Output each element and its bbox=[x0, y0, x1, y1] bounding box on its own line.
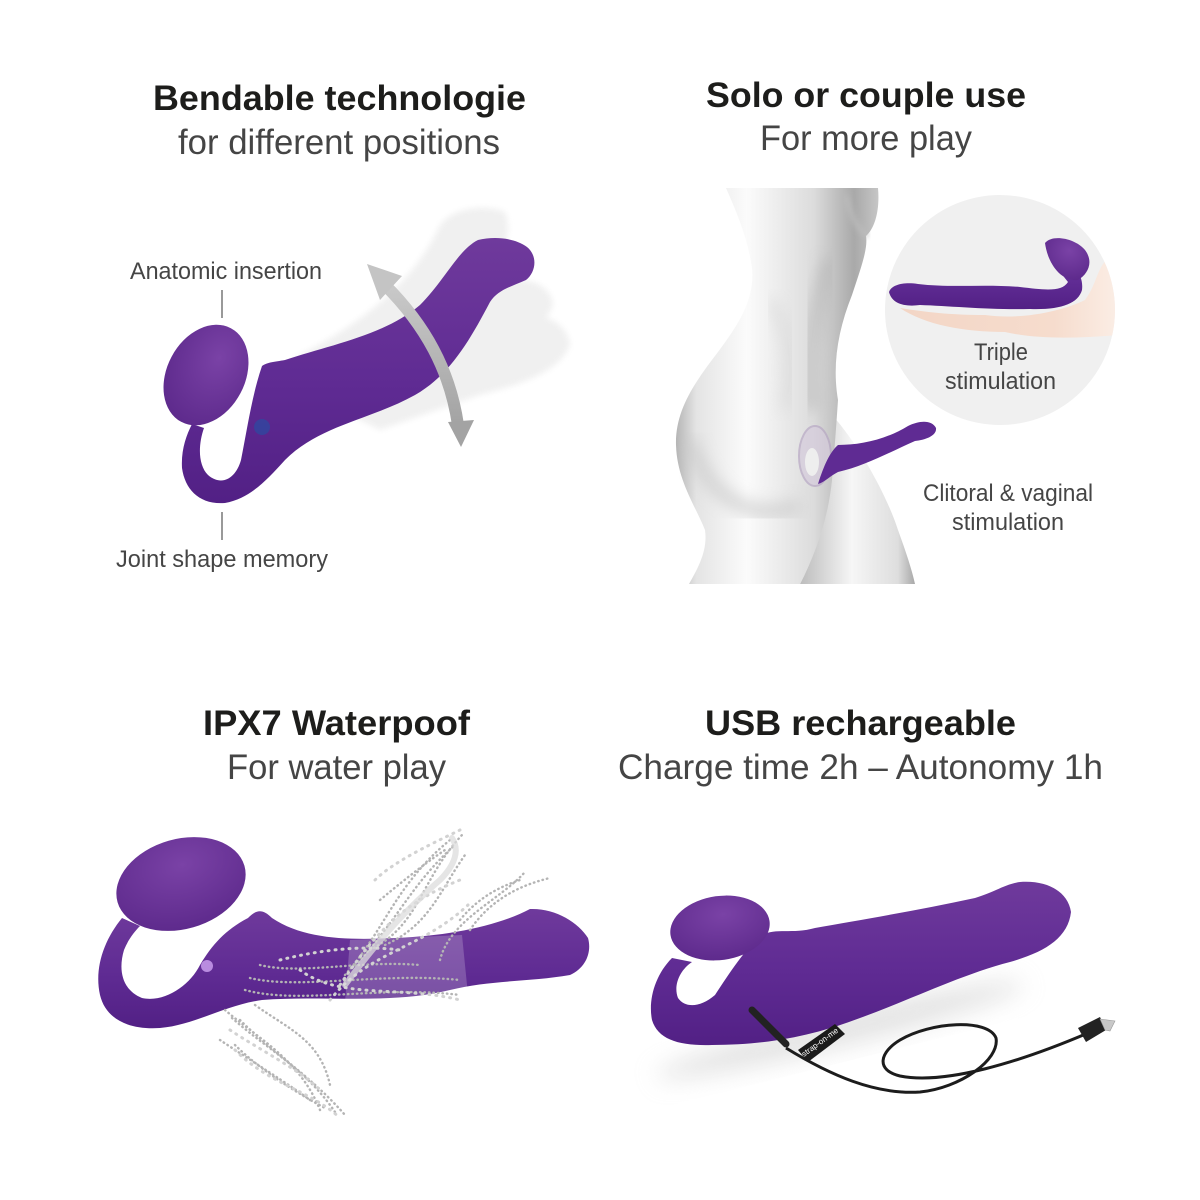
label: clitoral and vaginal stimulation: stimulation bbox=[952, 509, 1064, 536]
heading: solo or couple use bbox=[706, 76, 1026, 158]
label: triple stimulation bbox=[945, 339, 1056, 395]
power button bbox=[201, 960, 213, 972]
product: horizontal purple device bbox=[98, 823, 589, 1028]
front leg bbox=[800, 415, 915, 584]
panel: solo or couple use bbox=[676, 76, 1120, 584]
mannequin figure bbox=[676, 188, 915, 584]
small product worn on figure bbox=[799, 422, 936, 486]
panel: waterproof bbox=[98, 704, 589, 1118]
product shadow bbox=[652, 969, 1028, 1091]
heading: bendable technologie: Bendable technologie bbox=[153, 79, 526, 118]
label: joint shape memory: Joint shape memory bbox=[116, 546, 328, 573]
label: triple stimulation: stimulation bbox=[945, 368, 1056, 395]
power button bbox=[254, 419, 270, 435]
heading: USB rechargeable: Charge time 2h – Autonomy 1h bbox=[618, 748, 1103, 787]
heading: USB rechargeable bbox=[618, 704, 1103, 787]
inset circle: triple stimulation bbox=[885, 195, 1120, 425]
heading: solo or couple use: For more play bbox=[760, 119, 972, 158]
arrow: bend direction bbox=[367, 264, 474, 447]
water splash band bbox=[220, 830, 550, 1118]
product in hand bbox=[889, 238, 1089, 309]
cable tag text: strap-on-me bbox=[800, 1026, 841, 1059]
product: purple device with charging port bbox=[651, 882, 1071, 1045]
heading: solo or couple use: Solo or couple use bbox=[706, 76, 1026, 115]
label: clitoral and vaginal stimulation: Clitoral & vaginal bbox=[923, 480, 1093, 507]
hands holding product bbox=[900, 262, 1115, 338]
panel: USB rechargeable bbox=[618, 704, 1115, 1092]
heading: bendable technologie: for different positions bbox=[178, 123, 500, 162]
heading: IPX7 waterpoof: For water play bbox=[227, 748, 446, 787]
heading: USB rechargeable: USB rechargeable bbox=[705, 704, 1016, 743]
label: triple stimulation: Triple bbox=[974, 339, 1028, 366]
torso and rear leg bbox=[676, 188, 878, 584]
heading: bendable technologie bbox=[153, 79, 526, 162]
motion ghosts of the bending shaft bbox=[290, 208, 570, 430]
heading: IPX7 waterpoof bbox=[203, 704, 470, 787]
label: clitoral and vaginal stimulation bbox=[923, 480, 1093, 536]
charging cable with USB plug bbox=[752, 1010, 1115, 1092]
label: anatomic insertion: Anatomic insertion bbox=[130, 258, 322, 285]
product: bent purple device bbox=[147, 238, 534, 503]
heading: IPX7 waterpoof: IPX7 Waterpoof bbox=[203, 704, 470, 743]
panel: bendable technology bbox=[116, 79, 570, 573]
